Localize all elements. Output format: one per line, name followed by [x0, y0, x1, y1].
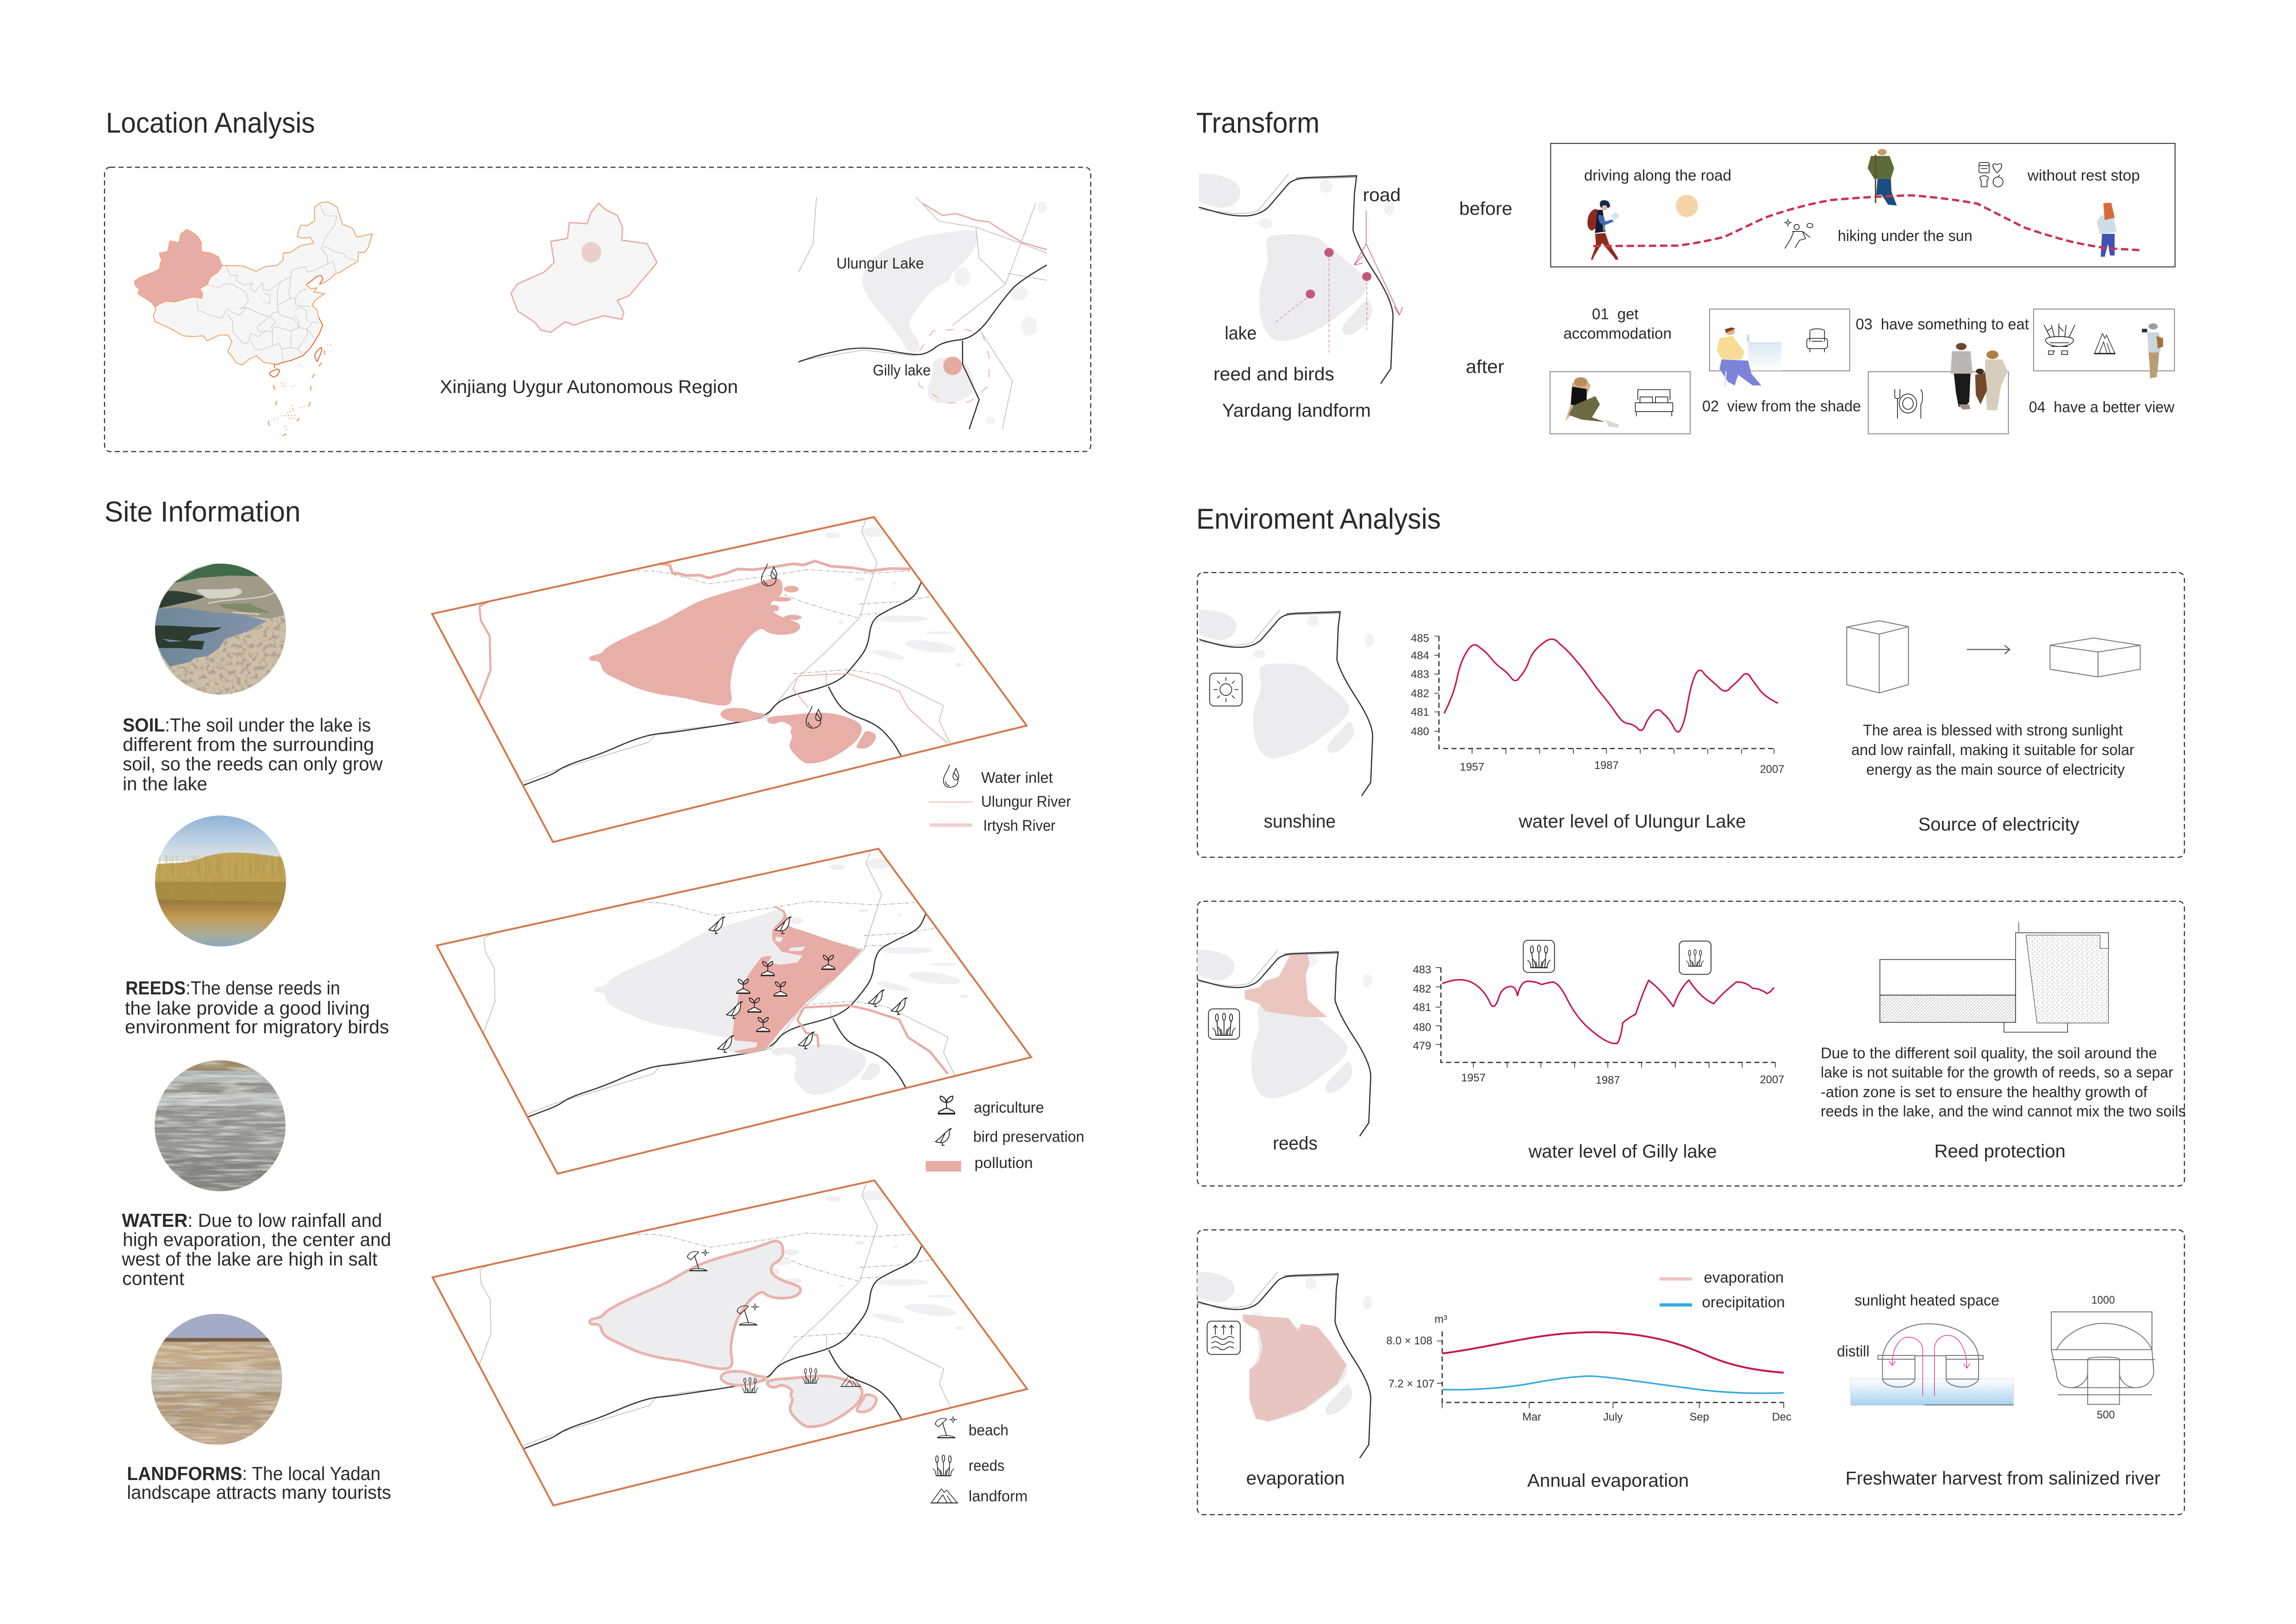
legend: landscape features: landform — [969, 1488, 1027, 1505]
label: reed and birds: reed and birds — [1213, 364, 1334, 384]
text: soil description — [123, 714, 383, 794]
panel: reeds analysis — [1197, 901, 2186, 1186]
chart: water level of Ulungur Lake: 2007 — [1760, 764, 1784, 776]
icon: reeds badge — [1208, 1009, 1239, 1039]
chart: water system map — [432, 517, 1027, 842]
diagram: distiller dimensions — [2051, 1294, 2155, 1421]
icon: beach — [935, 1417, 957, 1438]
icon: rest stop symbols — [1979, 162, 2003, 187]
label: sunshine: sunshine — [1263, 812, 1336, 832]
icon: landform — [841, 1376, 861, 1387]
chart: annual evaporation: 7.2 × 107 — [1388, 1378, 1434, 1390]
label: water level of Gilly lake: water level of Gilly lake — [1528, 1141, 1717, 1162]
text: reed protection description: lake is not suitable for the growth of reeds, so a separ — [1821, 1064, 2173, 1081]
text: landforms description — [127, 1463, 391, 1503]
text: reeds description: REEDS:The dense reeds in — [125, 977, 340, 999]
legend: water system — [929, 765, 1071, 835]
stop 04: better view — [2034, 309, 2174, 378]
panel: sunshine analysis — [1197, 573, 2184, 857]
icon: sun — [1210, 673, 1242, 706]
label: Gilly lake: Gilly lake — [873, 362, 931, 379]
chart: landscape features map — [433, 1181, 1027, 1505]
text: water description: WATER: Due to low rainfall and — [122, 1210, 382, 1231]
legend: evaporation and precipitation — [1660, 1269, 1785, 1311]
legend: evaporation and precipitation: orecipitation — [1702, 1294, 1785, 1311]
chart: water level of Ulungur Lake: 482 — [1411, 688, 1429, 700]
label: Freshwater harvest from salinized river: Freshwater harvest from salinized river — [1845, 1468, 2160, 1488]
text: 01 get accommodation: accommodation — [1563, 325, 1672, 343]
chart: water level of Gilly lake: 1957 — [1461, 1072, 1486, 1084]
icon: bed — [1635, 390, 1673, 416]
text: soil description: SOIL:The soil under the lake is — [123, 714, 371, 736]
label: sunlight heated space: sunlight heated space — [1854, 1292, 1999, 1309]
panel: location analysis — [105, 167, 1091, 451]
chart: annual evaporation: m³ — [1434, 1313, 1447, 1325]
label: evaporation: evaporation — [1246, 1468, 1345, 1488]
text: reed protection description: -ation zone is set to ensure the healthy growth of — [1821, 1084, 2148, 1101]
figure: backpacker reading map — [1587, 200, 1619, 260]
icon: agriculture — [939, 1096, 955, 1114]
text: water description: content — [122, 1268, 184, 1289]
stop 03: food — [1868, 343, 2009, 434]
chart: water level of Ulungur Lake: 1987 — [1594, 760, 1619, 772]
chart: water level of Gilly lake: 481 — [1413, 1002, 1431, 1014]
icon: bird — [935, 1129, 952, 1145]
icon: water inlet — [944, 765, 959, 787]
photo: Yadan landforms — [149, 1312, 284, 1447]
heading: Transform: Transform — [1196, 107, 1319, 139]
text: 02 view from the shade: 02 view from the shade — [1702, 398, 1861, 415]
icon: hiker under sun — [1785, 219, 1813, 248]
icon: evaporation badge — [1207, 1321, 1240, 1355]
chart: water level of Gilly lake: 1987 — [1596, 1074, 1620, 1087]
text: water description: west of the lake are high in salt — [121, 1249, 377, 1270]
chart: annual evaporation: 8.0 × 108 — [1386, 1335, 1432, 1347]
panel: soil — [123, 560, 383, 794]
chart: water level of Ulungur Lake: 1957 — [1460, 762, 1484, 774]
chart: annual evaporation — [1386, 1313, 1792, 1424]
photo: reeds — [154, 814, 288, 949]
legend: landscape features — [931, 1417, 1027, 1505]
label: Annual evaporation: Annual evaporation — [1527, 1471, 1689, 1491]
label: distill: distill — [1837, 1343, 1869, 1360]
figure: photographer — [2142, 323, 2163, 378]
label: 1000: 1000 — [2091, 1294, 2115, 1306]
icon: landform — [931, 1489, 958, 1503]
chart: water level of Gilly lake: 483 — [1413, 964, 1431, 976]
text: source of electricity description — [1851, 722, 2134, 779]
panel: water — [121, 1059, 391, 1289]
icon: reeds — [933, 1455, 954, 1476]
label: reeds: reeds — [1273, 1133, 1318, 1154]
icon: sun — [1676, 195, 1698, 217]
text: driving along the road: driving along the road — [1584, 167, 1731, 184]
dashed hiking route and figures — [1593, 149, 2140, 257]
text: hiking under the sun: hiking under the sun — [1838, 227, 1972, 244]
map: regional lakes and roads — [798, 197, 1047, 429]
text: source of electricity description: The area is blessed with strong sunlight — [1863, 722, 2123, 739]
label: Ulungur Lake: Ulungur Lake — [836, 255, 924, 272]
chart: water level of Ulungur Lake: 483 — [1411, 669, 1429, 681]
chart: water level of Gilly lake: 2007 — [1760, 1074, 1784, 1086]
panel: reeds — [125, 814, 389, 1037]
icons: beach — [687, 1249, 759, 1325]
legend: landscape features: reeds — [969, 1457, 1004, 1474]
chart: annual evaporation: Sep — [1690, 1412, 1709, 1424]
label: 500: 500 — [2097, 1409, 2115, 1421]
panel: landforms — [127, 1312, 391, 1503]
heading: Site Information: Site Information — [105, 496, 301, 528]
diagram: solar distiller — [1837, 1292, 2014, 1405]
icon: armchair — [1807, 329, 1828, 352]
text: water description — [121, 1210, 391, 1289]
chart: annual evaporation: Mar — [1522, 1412, 1541, 1424]
icons: agriculture — [737, 955, 835, 1031]
label: before: before — [1459, 199, 1512, 219]
chart: water level of Ulungur Lake: 484 — [1411, 650, 1429, 662]
text: 01 get accommodation — [1563, 306, 1672, 343]
label: Reed protection: Reed protection — [1935, 1141, 2066, 1162]
icon: reeds badge low — [1679, 941, 1711, 974]
panel: before journey — [1551, 144, 2175, 267]
text: soil description: soil, so the reeds can only grow — [123, 753, 383, 775]
icon: water inlet north — [761, 564, 777, 586]
panel: after stops — [1550, 306, 2175, 434]
chart: annual evaporation: Dec — [1772, 1412, 1792, 1424]
map: reeds — [1197, 950, 1372, 1136]
text: without rest stop: without rest stop — [2027, 167, 2140, 184]
text: source of electricity description: and low rainfall, making it suitable for solar — [1851, 742, 2134, 759]
label: road: road — [1363, 185, 1401, 206]
text: soil description: different from the surrounding — [123, 734, 374, 755]
panel: evaporation analysis — [1197, 1230, 2184, 1515]
text: Xinjiang Uygur Autonomous Region: Xinjiang Uygur Autonomous Region — [440, 377, 738, 397]
text: 03 have something to eat: 03 have something to eat — [1856, 316, 2029, 333]
label: water level of Ulungur Lake: water level of Ulungur Lake — [1518, 812, 1746, 832]
diagram: tall volume to low volume — [1847, 621, 2140, 693]
text: reed protection description: reeds in the lake, and the wind cannot mix the two soils — [1821, 1103, 2186, 1120]
map: Xinjiang outline with site marker — [511, 203, 657, 332]
chart: water level of Gilly lake — [1413, 964, 1784, 1087]
chart: water level of Gilly lake: 479 — [1413, 1040, 1431, 1052]
icon: water inlet south — [806, 706, 821, 728]
chart: water level of Gilly lake: 480 — [1413, 1022, 1431, 1034]
icon: reeds badge high — [1523, 940, 1555, 973]
text: water description: high evaporation, the center and — [123, 1229, 391, 1250]
legend: land use: pollution — [975, 1155, 1033, 1172]
label: lake: lake — [1225, 323, 1257, 344]
route arrows and pins — [1275, 211, 1403, 355]
label: Yardang landform: Yardang landform — [1222, 400, 1371, 421]
text: landforms description: LANDFORMS: The local Yadan — [127, 1463, 380, 1484]
legend: landscape features: beach — [969, 1422, 1008, 1439]
heading: Location Analysis: Location Analysis — [106, 107, 315, 139]
label: Source of electricity: Source of electricity — [1918, 814, 2079, 835]
heading: Enviroment Analysis: Enviroment Analysis — [1196, 503, 1441, 535]
text: reeds description: environment for migratory birds — [125, 1016, 389, 1037]
legend: land use: agriculture — [974, 1099, 1044, 1116]
map: sunshine — [1199, 610, 1374, 796]
legend: water system: Irtysh River — [983, 818, 1056, 835]
legend: water system: Water inlet — [981, 769, 1053, 787]
text: reeds description: the lake provide a good living — [125, 997, 370, 1018]
text: reed protection description — [1821, 1045, 2186, 1120]
text: source of electricity description: energy as the main source of electricity — [1866, 762, 2125, 779]
legend: land use — [926, 1096, 1084, 1172]
icons: birds — [709, 917, 907, 1052]
text: 04 have a better view: 04 have a better view — [2029, 399, 2175, 416]
text: 01 get accommodation: 01 get — [1592, 306, 1638, 323]
text: reeds description — [125, 977, 389, 1037]
icons: reeds — [742, 1368, 819, 1393]
map: route through lake — [1199, 174, 1394, 384]
diagram: reed protection section — [1880, 922, 2109, 1032]
text: soil description: in the lake — [123, 773, 207, 794]
chart: water level of Gilly lake: 482 — [1413, 983, 1431, 995]
icon: plant pot — [2044, 324, 2075, 355]
text: landforms description: landscape attracts many tourists — [127, 1482, 391, 1503]
chart: water level of Ulungur Lake: 480 — [1411, 726, 1429, 738]
chart: water level of Ulungur Lake — [1411, 633, 1784, 776]
icon: plate and cutlery — [1895, 389, 1923, 418]
chart: land use map — [436, 849, 1031, 1174]
icon: mountain — [2095, 333, 2115, 354]
stop 02: shaded view — [1710, 309, 1850, 387]
map: China with Xinjiang highlighted — [134, 202, 373, 436]
label: after: after — [1466, 357, 1504, 377]
chart: water level of Ulungur Lake: 481 — [1411, 706, 1429, 718]
panel: transform map — [1199, 174, 1403, 421]
chart: annual evaporation: July — [1603, 1412, 1623, 1424]
stop 01: accommodation — [1550, 372, 1690, 434]
map: evaporation — [1197, 1272, 1372, 1458]
legend: land use: bird preservation — [973, 1129, 1084, 1146]
photo: salt flats — [154, 1059, 288, 1194]
text: reed protection description: Due to the different soil quality, the soil around the — [1821, 1045, 2157, 1062]
legend: water system: Ulungur River — [981, 793, 1071, 810]
chart: water level of Ulungur Lake: 485 — [1411, 633, 1429, 645]
legend: evaporation and precipitation: evaporation — [1704, 1269, 1784, 1286]
photo: soil — [153, 560, 288, 696]
